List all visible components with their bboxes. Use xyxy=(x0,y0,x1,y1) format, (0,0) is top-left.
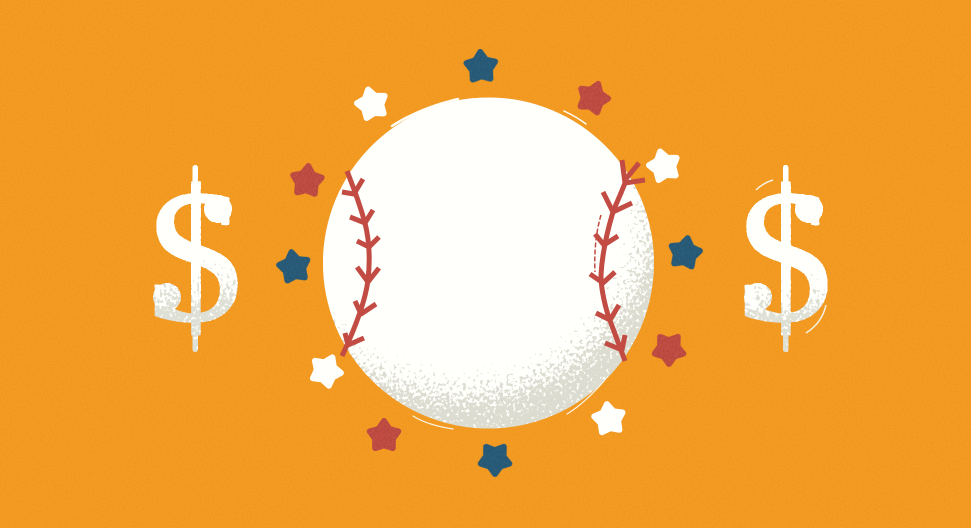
dollar white top: $ xyxy=(148,152,242,362)
left dollar sign xyxy=(148,152,242,362)
icon: red star lower right xyxy=(650,328,689,367)
icon: blue star left xyxy=(277,250,310,281)
icon: white star bottom right xyxy=(593,402,625,433)
icon: red star upper left xyxy=(292,165,323,194)
dollar white top: $ xyxy=(738,152,832,362)
left seam xyxy=(342,171,379,356)
icon: blue star top xyxy=(466,51,496,80)
icon: white star lower left xyxy=(308,351,345,388)
right dollar sign xyxy=(738,152,832,362)
dollar shaded base: $ xyxy=(738,152,832,362)
icon: white star right upper xyxy=(646,148,681,181)
illustration xyxy=(44,24,875,506)
dollar brush scratches xyxy=(756,180,826,333)
icon: blue star right xyxy=(669,236,702,267)
brush scratches around ball xyxy=(392,99,604,429)
ball shading base xyxy=(323,98,654,428)
baseball xyxy=(323,98,654,430)
dollar shaded base: $ xyxy=(148,152,242,362)
icon: red star bottom left xyxy=(370,421,398,448)
icon: red star upper right xyxy=(575,79,612,114)
icon: white star top left xyxy=(354,86,389,119)
icon: blue star bottom xyxy=(476,438,515,477)
right seam xyxy=(590,160,645,361)
ball white highlight with speckled edge xyxy=(323,98,654,428)
